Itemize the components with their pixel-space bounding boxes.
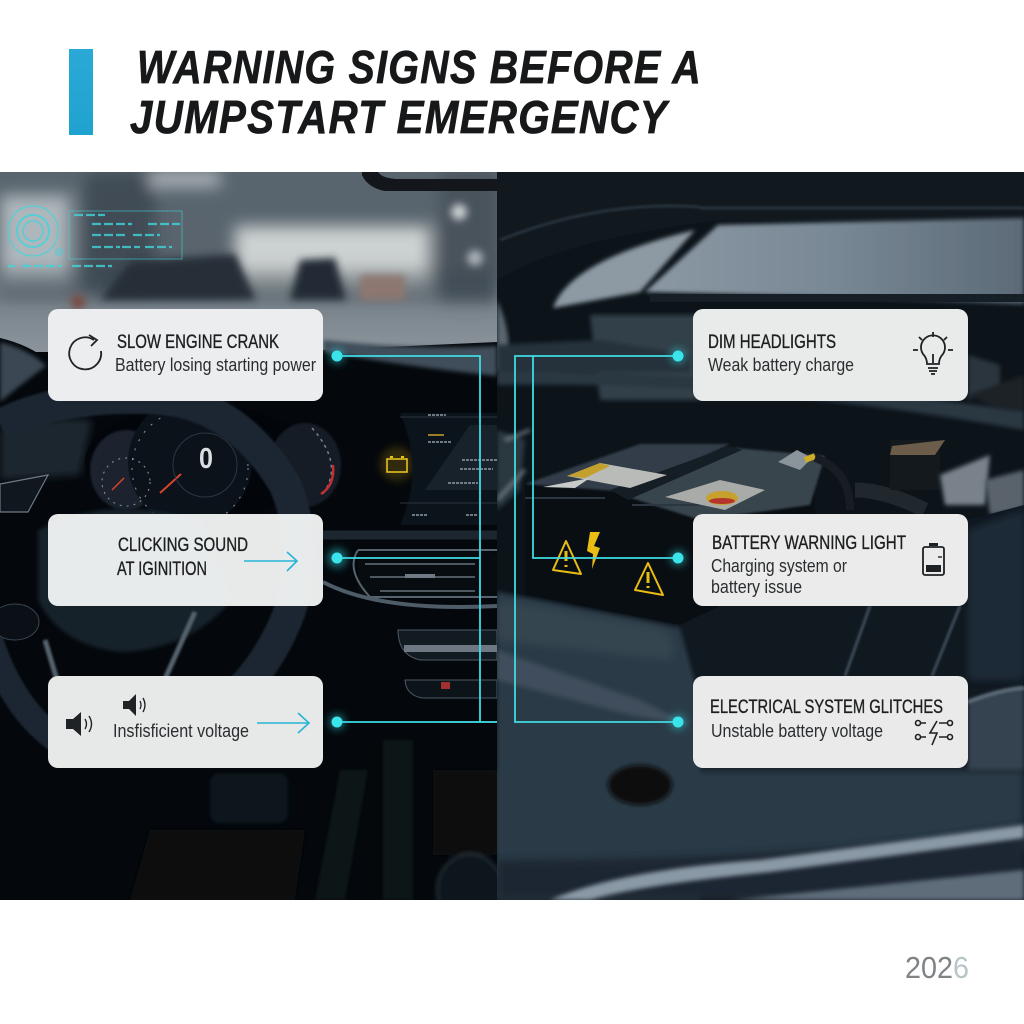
panel: engine bay photo [497,172,1024,900]
arrow [257,713,309,733]
lower footwell [131,740,497,900]
HUD overlay [8,206,182,266]
instrument cluster: 0 [199,443,213,475]
card: clicking sound: AT IGINITION [117,559,207,580]
accent bar [69,49,93,135]
cowl panels [497,315,1024,430]
title: WARNING SIGNS BEFORE A [137,41,702,93]
icon: battery warning light [380,447,414,481]
icon: light bulb [913,332,953,374]
icon: hazard triangles and bolt [553,532,663,595]
card: slow engine crank [48,309,323,401]
battery [525,443,826,519]
rear-view mirror [362,172,497,191]
instrument cluster [85,414,342,514]
year label: 6 [953,950,969,985]
title [130,41,702,143]
year label: 202 [905,950,953,985]
lower engine cover [497,505,1024,900]
card: dim headlights: Weak battery charge [708,355,854,375]
card: insufficient voltage [48,676,323,768]
infotainment screen [400,413,497,525]
card: dim headlights [693,309,968,401]
card: battery warning light: BATTERY WARNING LIGHT [712,533,906,554]
dashboard [0,338,497,482]
card: slow engine crank: SLOW ENGINE CRANK [117,332,279,353]
icon: speaker small [123,694,145,716]
engine bay parts [497,430,530,510]
battery terminal and cable [778,440,1024,515]
card: clicking sound [48,514,323,606]
card: battery warning light [693,514,968,606]
card: slow engine crank: Battery losing starting power [115,355,316,375]
center console buttons [398,630,497,722]
card: electrical system glitches [693,676,968,768]
icon: battery [923,543,944,575]
card: electrical system glitches: ELECTRICAL SYSTEM GLITCHES [710,697,943,718]
card: battery warning light: battery issue [711,577,802,597]
card: insufficient voltage: Insfisficient voltage [113,721,249,741]
icon: speaker large [66,712,92,736]
card: dim headlights: DIM HEADLIGHTS [708,332,836,353]
connector dots [327,348,686,730]
card: clicking sound: CLICKING SOUND [118,535,248,556]
title: JUMPSTART EMERGENCY [130,91,670,143]
icon: circuit bolt [916,720,952,745]
panel: header background [0,0,1024,172]
panel: car interior photo [0,172,503,926]
windshield view [0,172,497,352]
icon: rotate arrow [69,335,101,369]
hood and windshield view [497,203,1024,372]
steering wheel [0,398,299,745]
air vent [0,475,497,607]
card: electrical system glitches: Unstable battery voltage [711,721,883,741]
card: battery warning light: Charging system or [711,556,847,576]
arrow [244,552,297,571]
connector lines [337,356,678,722]
